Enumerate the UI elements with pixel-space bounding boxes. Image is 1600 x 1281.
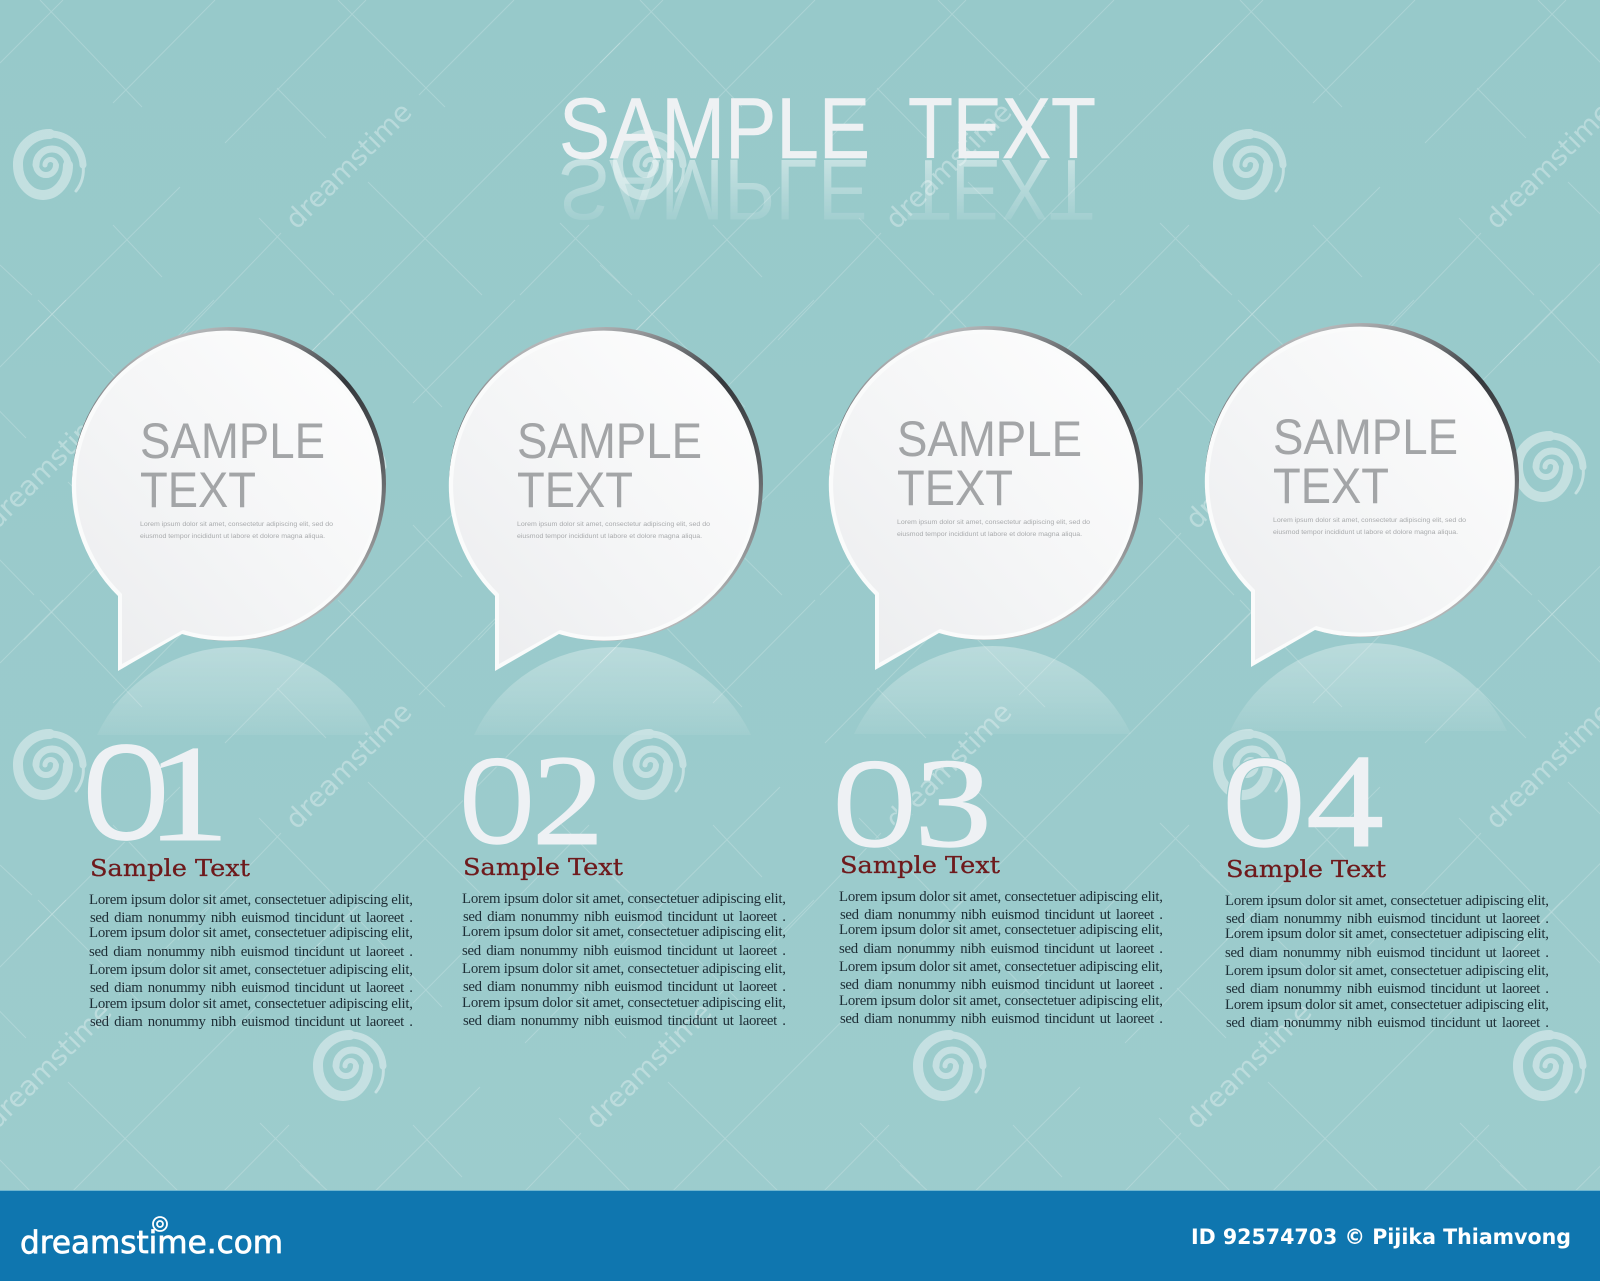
dome reflection 2 [474, 647, 751, 735]
number 02 [458, 729, 604, 873]
footer banner [0, 1190, 1600, 1281]
column 2 body [462, 891, 786, 1029]
column 1 heading: Sample Text [90, 856, 251, 882]
column 1 body: sed diam nonummy nibh euismod tincidunt ut laoreet . [90, 910, 413, 926]
column 1 body: Lorem ipsum dolor sit amet, consectetuer adipiscing elit, [89, 962, 413, 978]
column 3 body: Lorem ipsum dolor sit amet, consectetuer adipiscing elit, [839, 993, 1163, 1009]
number 01: 1 [146, 717, 230, 870]
bubble shape 3 [829, 326, 1143, 670]
column 1 body: sed diam nonummy nibh euismod tincidunt ut laoreet . [90, 1014, 413, 1030]
column 3 body: sed diam nonummy nibh euismod tincidunt ut laoreet . [839, 941, 1163, 957]
bubble shape 2 [449, 327, 763, 671]
watermark pattern: dreamstime [280, 97, 418, 235]
bubble heading 2: SAMPLE [517, 413, 702, 469]
watermark pattern: dreamstime [880, 97, 1018, 235]
watermark pattern: dreamstime [880, 697, 1018, 835]
column 2 body: Lorem ipsum dolor sit amet, consectetuer adipiscing elit, [462, 995, 786, 1011]
column 3 body [839, 889, 1163, 1027]
column 1 body: Lorem ipsum dolor sit amet, consectetuer adipiscing elit, [89, 925, 413, 941]
column 4 body: sed diam nonummy nibh euismod tincidunt ut laoreet . [1226, 981, 1549, 997]
bubble shape 1 [72, 327, 386, 671]
bubble small text 2: eiusmod tempor incididunt ut labore et dolore magna aliqua. [517, 533, 702, 540]
bubble shape 4 [1205, 323, 1519, 667]
bubble heading line 2: TEXT [140, 462, 256, 518]
title reflection: TEXT [906, 141, 1094, 237]
column 1 body: Lorem ipsum dolor sit amet, consectetuer adipiscing elit, [89, 996, 413, 1012]
dome reflection 3 [854, 646, 1131, 734]
title: TEXT [908, 81, 1096, 177]
column 4 body: sed diam nonummy nibh euismod tincidunt ut laoreet . [1226, 1015, 1549, 1031]
panel: speech bubble 2 [449, 327, 763, 735]
footer logo text: dreamstime.com [20, 1225, 283, 1261]
column 3 heading: Sample Text [840, 853, 1001, 879]
column 4 body [1225, 893, 1549, 1031]
number 03: 3 [914, 732, 992, 874]
column 3 body: sed diam nonummy nibh euismod tincidunt ut laoreet . [840, 907, 1163, 923]
bubble heading 1: SAMPLE [140, 413, 325, 469]
bubble small text 2: eiusmod tempor incididunt ut labore et dolore magna aliqua. [1273, 529, 1458, 536]
column 1 body: sed diam nonummy nibh euismod tincidunt ut laoreet . [90, 980, 413, 996]
column 1 body: sed diam nonummy nibh euismod tincidunt ut laoreet . [89, 944, 413, 960]
number 01: 0 [81, 716, 171, 870]
column 3 body: Lorem ipsum dolor sit amet, consectetuer adipiscing elit, [839, 959, 1163, 975]
number 01 [81, 716, 230, 870]
bubble small text 1: Lorem ipsum dolor sit amet, consectetur adipiscing elit, sed do [1273, 517, 1466, 524]
bubble heading 4: SAMPLE [1273, 409, 1458, 465]
column 2 body: Lorem ipsum dolor sit amet, consectetuer adipiscing elit, [462, 891, 786, 907]
watermark pattern: dreamstime [280, 697, 418, 835]
bubble heading 3: SAMPLE [897, 411, 1082, 467]
panel: speech bubble 3 [829, 326, 1143, 734]
column 1 body: Lorem ipsum dolor sit amet, consectetuer adipiscing elit, [89, 892, 413, 908]
bubble small text 2: eiusmod tempor incididunt ut labore et dolore magna aliqua. [897, 531, 1082, 538]
number 04: 4 [1306, 727, 1384, 875]
number 04: 0 [1221, 732, 1307, 875]
title [559, 81, 1096, 177]
watermark pattern: dreamstime [580, 997, 718, 1135]
column 2 body: sed diam nonummy nibh euismod tincidunt ut laoreet . [463, 979, 786, 995]
footer credit: ID 92574703 © Pijika Thiamvong [1191, 1225, 1571, 1249]
column 2 body: sed diam nonummy nibh euismod tincidunt ut laoreet . [462, 943, 786, 959]
dome reflection 1 [97, 647, 374, 735]
column 1 text [89, 856, 413, 1030]
column 3 body: Lorem ipsum dolor sit amet, consectetuer adipiscing elit, [839, 889, 1163, 905]
column 4 text [1225, 857, 1549, 1031]
column 4 body: sed diam nonummy nibh euismod tincidunt ut laoreet . [1225, 945, 1549, 961]
bubble small text 1: Lorem ipsum dolor sit amet, consectetur adipiscing elit, sed do [517, 521, 710, 528]
column 2 heading: Sample Text [463, 855, 624, 881]
column 2 body: Lorem ipsum dolor sit amet, consectetuer adipiscing elit, [462, 961, 786, 977]
watermark pattern: dreamstime [1180, 997, 1318, 1135]
bubble heading line 2: TEXT [1273, 458, 1389, 514]
dome reflection 4 [1230, 643, 1507, 731]
watermark pattern: dreamstime [580, 397, 718, 535]
column 4 body: Lorem ipsum dolor sit amet, consectetuer adipiscing elit, [1225, 893, 1549, 909]
bubble small text 1: Lorem ipsum dolor sit amet, consectetur adipiscing elit, sed do [897, 519, 1090, 526]
column 1 body [89, 892, 413, 1030]
number 02: 2 [532, 729, 604, 873]
column 4 heading: Sample Text [1226, 857, 1387, 883]
column 3 body: Lorem ipsum dolor sit amet, consectetuer adipiscing elit, [839, 922, 1163, 938]
number 03: 0 [831, 736, 918, 874]
bubble heading line 2: TEXT [897, 460, 1013, 516]
column 4 body: Lorem ipsum dolor sit amet, consectetuer adipiscing elit, [1225, 926, 1549, 942]
title reflection [558, 141, 1094, 237]
title: SAMPLE [559, 81, 870, 177]
column 4 body: sed diam nonummy nibh euismod tincidunt ut laoreet . [1226, 911, 1549, 927]
column 2 body: sed diam nonummy nibh euismod tincidunt ut laoreet . [463, 1013, 786, 1029]
number 04 [1221, 727, 1384, 875]
bubble small text 2: eiusmod tempor incididunt ut labore et dolore magna aliqua. [140, 533, 325, 540]
bubble heading line 2: TEXT [517, 462, 633, 518]
icon: logo spiral [153, 1217, 167, 1231]
bubble small text 1: Lorem ipsum dolor sit amet, consectetur adipiscing elit, sed do [140, 521, 333, 528]
column 4 body: Lorem ipsum dolor sit amet, consectetuer adipiscing elit, [1225, 997, 1549, 1013]
column 3 body: sed diam nonummy nibh euismod tincidunt ut laoreet . [840, 1011, 1163, 1027]
panel: speech bubble 4 [1205, 323, 1519, 731]
column 4 body: Lorem ipsum dolor sit amet, consectetuer adipiscing elit, [1225, 963, 1549, 979]
column 2 text [462, 855, 786, 1029]
column 2 body: sed diam nonummy nibh euismod tincidunt ut laoreet . [463, 909, 786, 925]
number 03 [831, 732, 992, 874]
title reflection: SAMPLE [558, 141, 869, 237]
column 3 text [839, 853, 1163, 1027]
panel: speech bubble 1 [72, 327, 386, 735]
column 2 body: Lorem ipsum dolor sit amet, consectetuer adipiscing elit, [462, 924, 786, 940]
number 02: 0 [458, 733, 536, 871]
watermark pattern: dreamstime [1180, 397, 1318, 535]
column 3 body: sed diam nonummy nibh euismod tincidunt ut laoreet . [840, 977, 1163, 993]
